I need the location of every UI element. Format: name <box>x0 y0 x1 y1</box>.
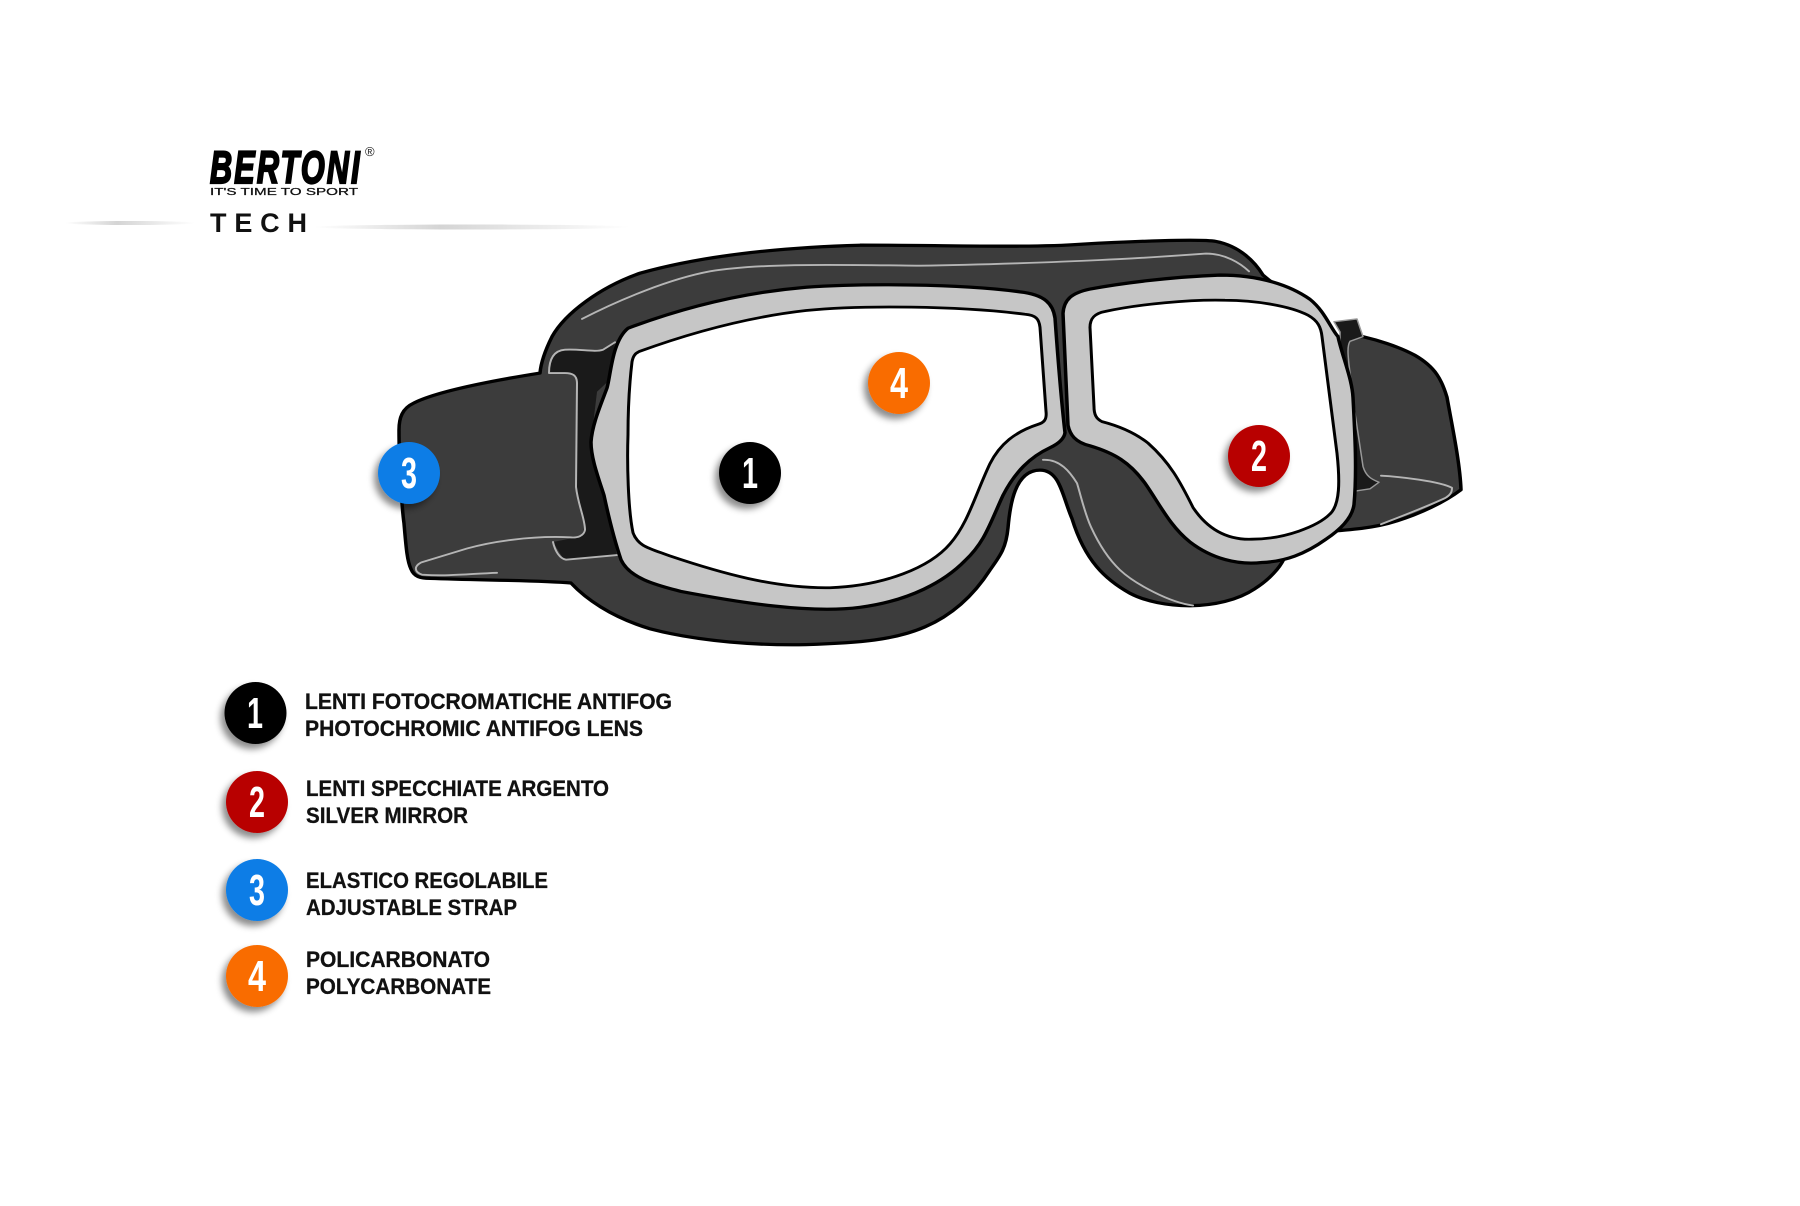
legend item 4: 4 <box>248 952 266 1001</box>
heading: TECH: TECH <box>210 208 307 238</box>
legend item 1: PHOTOCHROMIC ANTIFOG LENS <box>305 716 643 741</box>
legend <box>224 682 672 1007</box>
legend item 2: SILVER MIRROR <box>306 803 468 828</box>
strap highlight, left <box>416 342 617 575</box>
legend item 3 <box>226 859 548 921</box>
right lens <box>1090 300 1339 539</box>
legend item 2: LENTI SPECCHIATE ARGENTO <box>306 776 609 801</box>
marker 4 on lens <box>868 352 930 414</box>
strap highlight, right <box>1381 476 1452 524</box>
illustration: goggles <box>399 240 1461 645</box>
legend item 4: POLYCARBONATE <box>306 974 491 999</box>
legend item 2 <box>226 771 609 833</box>
legend item 2: 2 <box>249 778 265 827</box>
nose highlight line <box>1043 460 1193 605</box>
right lens frame <box>1063 275 1356 563</box>
left lens <box>628 307 1046 588</box>
logo tagline: IT'S TIME TO SPORT <box>210 187 358 198</box>
logo: Bertoni brand <box>210 143 375 198</box>
right strap buckle, dark <box>1334 319 1379 495</box>
legend item 3: ELASTICO REGOLABILE <box>306 868 548 893</box>
legend item 4 <box>226 945 491 1007</box>
marker 3 on strap: 3 <box>401 449 417 498</box>
registered mark: ® <box>365 144 375 159</box>
marker 2 on right lens: 2 <box>1251 432 1267 481</box>
logo wordmark: BERTONI <box>210 143 361 194</box>
marker 4 on lens: 4 <box>890 359 908 408</box>
legend item 3: 3 <box>249 866 265 915</box>
legend item 1: 1 <box>247 689 263 738</box>
marker 2 on right lens <box>1228 425 1290 487</box>
left lens frame <box>591 285 1065 609</box>
marker 1 on left lens: 1 <box>742 449 758 498</box>
top highlight line <box>582 254 1249 319</box>
legend item 3: ADJUSTABLE STRAP <box>306 895 517 920</box>
legend item 4: POLICARBONATO <box>306 947 490 972</box>
left strap buckle, dark <box>549 342 617 560</box>
goggle body and elastic strap <box>399 240 1461 645</box>
legend item 1 <box>224 682 672 744</box>
heading: TECH <box>65 208 630 238</box>
marker 1 on left lens <box>719 442 781 504</box>
legend item 1: LENTI FOTOCROMATICHE ANTIFOG <box>305 689 672 714</box>
marker 3 on strap <box>378 442 440 504</box>
